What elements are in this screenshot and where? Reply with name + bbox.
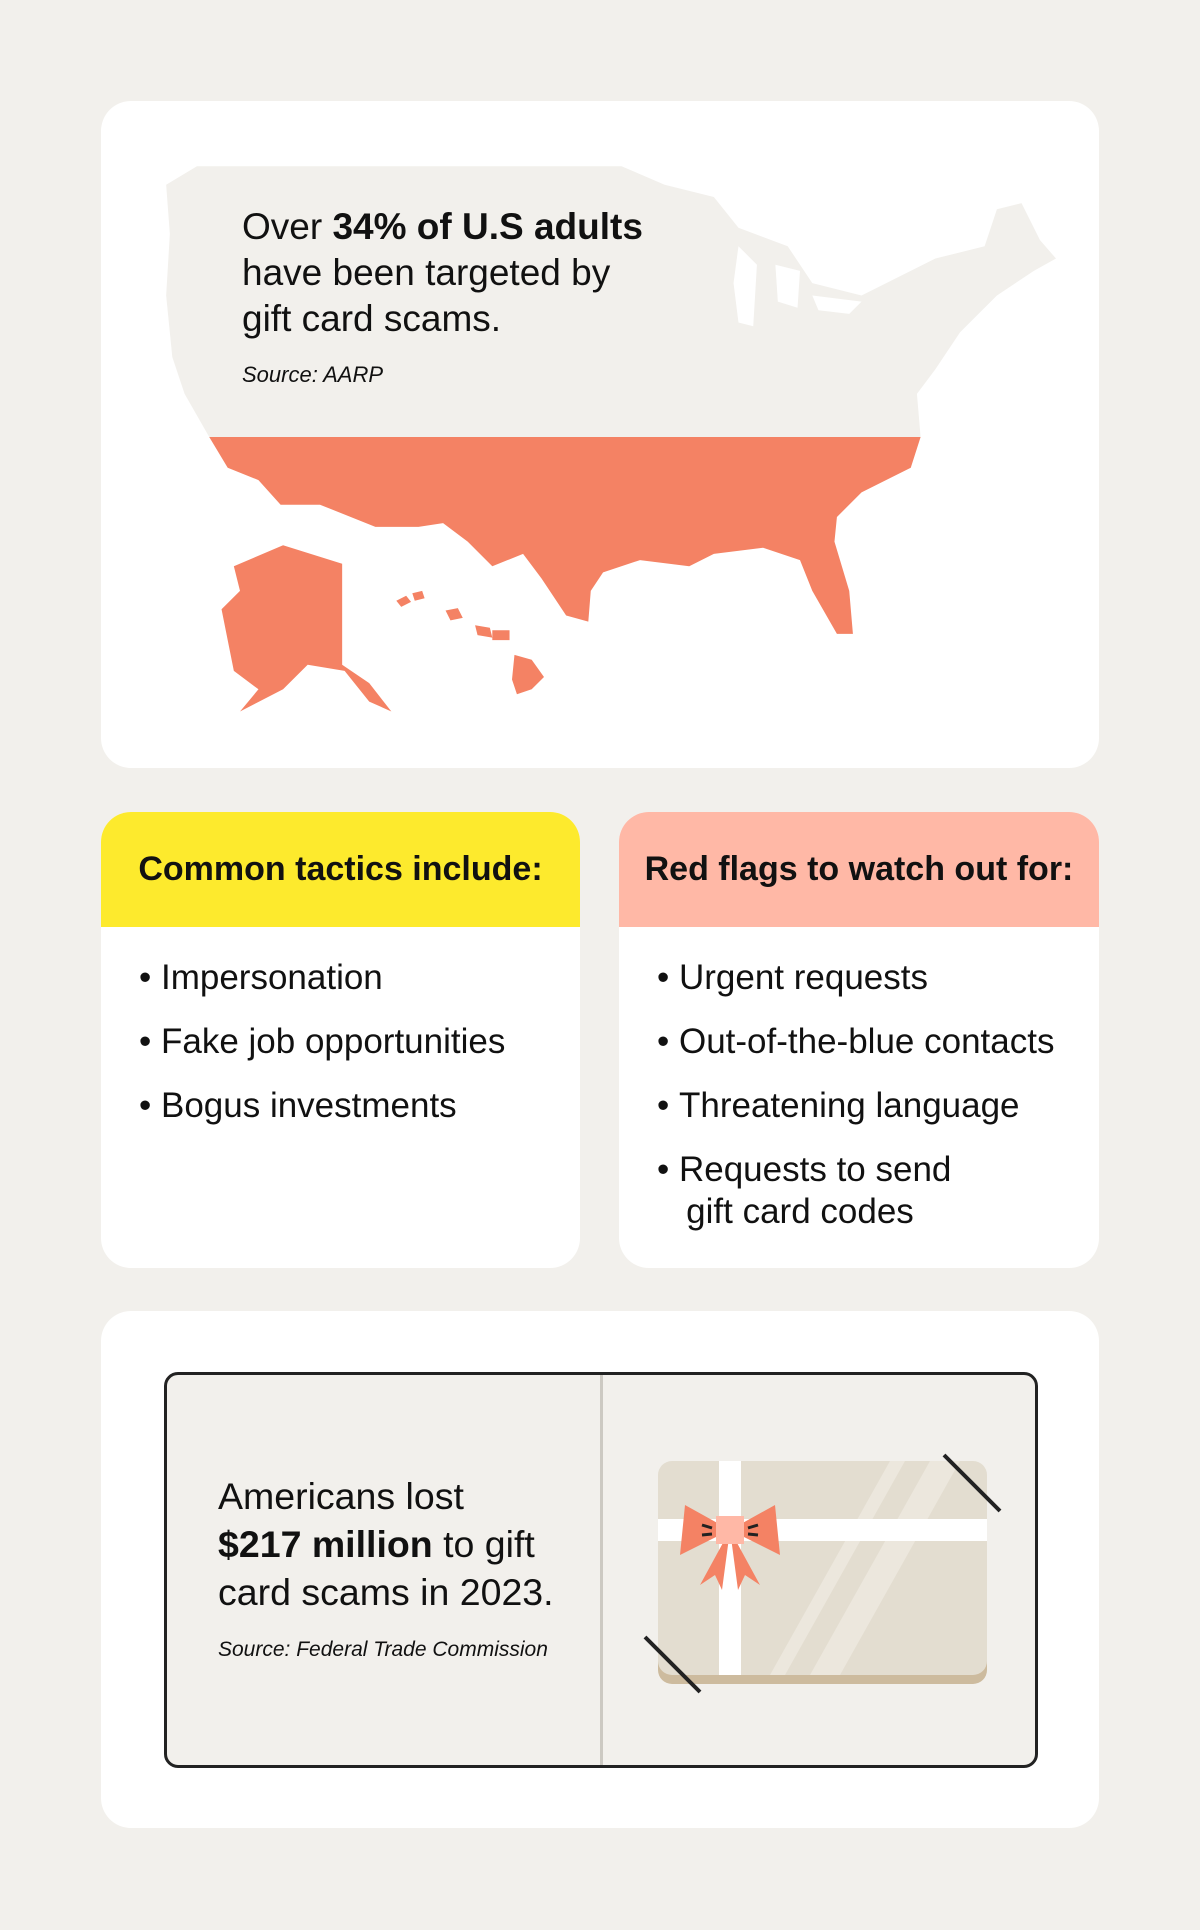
heading: common tactics: Common tactics include: [138,850,543,888]
inner framed box [164,1372,1038,1768]
list: red flags: • Out-of-the-blue contacts [657,1022,1054,1061]
list: red flags: gift card codes [686,1192,914,1231]
list: tactics: • Bogus investments [139,1086,457,1125]
stat text: $217 million [218,1475,554,1661]
panel: map statistic [101,101,1099,768]
stat text: 34%: Source: AARP [242,362,383,387]
panel: red flags [619,812,1099,1268]
stat text: 34%: have been targeted by [242,252,610,293]
heading: red flags [619,812,1099,927]
list: tactics [139,958,505,1125]
stat text: 34%: gift card scams. [242,298,501,339]
stat text: $217 million: card scams in 2023. [218,1571,554,1613]
stat text: 34% [242,206,643,387]
list: red flags: • Requests to send [657,1150,951,1189]
list: tactics: • Fake job opportunities [139,1022,505,1061]
list: tactics: • Impersonation [139,958,383,997]
heading: common tactics [101,812,580,927]
heading: red flags: Red flags to watch out for: [645,850,1073,888]
panel: common tactics [101,812,580,1268]
list: red flags: • Threatening language [657,1086,1020,1125]
map of USA [166,166,1056,712]
list: red flags: • Urgent requests [657,958,928,997]
stat text: $217 million: Americans lost [218,1475,464,1517]
stat text: $217 million: $217 million to gift [218,1523,535,1565]
stat text: $217 million: Source: Federal Trade Commission [218,1638,548,1661]
panel: losses [101,1311,1099,1828]
stat text: 34%: Over 34% of U.S adults [242,206,643,247]
icon: gift card [644,1454,1002,1694]
list: red flags [657,958,1054,1231]
